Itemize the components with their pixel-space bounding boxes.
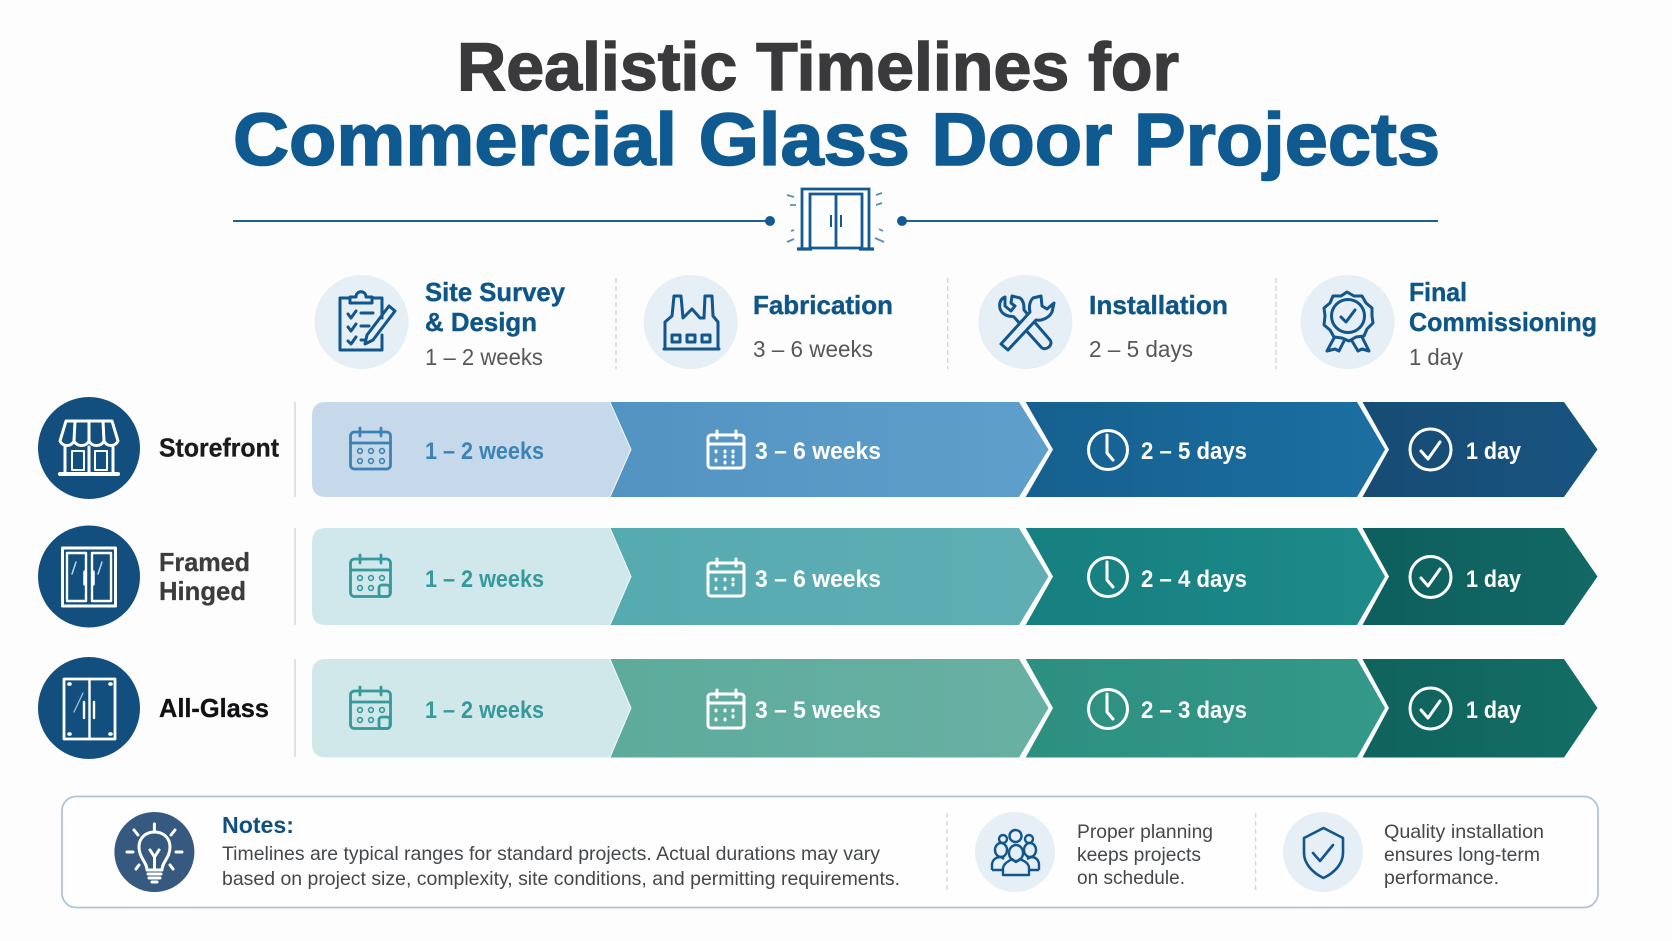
timeline: framed hinged: 2 – 4 days bbox=[1141, 566, 1247, 593]
tip: quality installation: Quality installation bbox=[1384, 821, 1544, 843]
label: framed hinged: Hinged bbox=[159, 576, 246, 606]
tip: quality installation: ensures long-term bbox=[1384, 844, 1540, 866]
row: framed hinged bbox=[38, 526, 1598, 628]
notes text: based on project size, complexity, site conditions, and permitting requirements. bbox=[222, 868, 900, 890]
icon: storefront bbox=[38, 397, 140, 499]
tip: proper planning: keeps projects bbox=[1077, 844, 1201, 866]
icon: calendar bbox=[708, 431, 744, 468]
timeline: storefront: 1 – 2 weeks bbox=[425, 438, 544, 465]
phase header: final commissioning: Commissioning bbox=[1409, 307, 1597, 337]
label: storefront: Storefront bbox=[159, 432, 279, 462]
timeline: storefront bbox=[312, 402, 1598, 497]
timeline: all-glass: 1 – 2 weeks bbox=[425, 697, 544, 724]
icon: calendar bbox=[708, 559, 744, 596]
phase header: site survey and design: Site Survey bbox=[425, 277, 566, 307]
label: framed hinged: Framed bbox=[159, 547, 250, 577]
title bbox=[233, 29, 1440, 181]
timeline: storefront: 3 – 6 weeks bbox=[755, 438, 881, 465]
phase header: final commissioning: Final bbox=[1409, 277, 1467, 307]
tip: proper planning: Proper planning bbox=[1077, 821, 1213, 843]
phase header: final commissioning bbox=[1276, 275, 1597, 370]
icon: shield bbox=[1283, 812, 1363, 892]
timeline: framed hinged: 1 day bbox=[1466, 566, 1522, 593]
timeline: framed hinged: 3 – 6 weeks bbox=[755, 566, 881, 593]
icon: rosette bbox=[1324, 292, 1373, 351]
tip: quality installation: performance. bbox=[1384, 867, 1499, 889]
timeline: framed hinged bbox=[312, 528, 1598, 625]
icon: all-glass door bbox=[38, 657, 140, 759]
phase header: site survey and design: 1 – 2 weeks bbox=[425, 344, 543, 370]
icon: calendar bbox=[350, 428, 390, 469]
phase header: installation: 2 – 5 days bbox=[1089, 336, 1193, 362]
timeline: framed hinged: 1 – 2 weeks bbox=[425, 566, 544, 593]
label: all-glass: All-Glass bbox=[159, 693, 269, 723]
phase header: fabrication bbox=[616, 275, 893, 369]
icon: check circle bbox=[1410, 688, 1451, 729]
phase header: fabrication: 3 – 6 weeks bbox=[753, 336, 873, 362]
icon: clock bbox=[1088, 558, 1128, 596]
timeline: storefront: 2 – 5 days bbox=[1141, 438, 1247, 465]
icon: factory bbox=[664, 296, 719, 349]
icon: wrench and screwdriver bbox=[1000, 296, 1054, 350]
icon: team bbox=[975, 812, 1055, 892]
timeline: storefront: 1 day bbox=[1466, 438, 1522, 465]
icon: check circle bbox=[1410, 556, 1451, 598]
icon: check circle bbox=[1410, 429, 1451, 470]
icon: calendar bbox=[350, 555, 390, 596]
icon: framed door bbox=[38, 526, 140, 628]
row: storefront bbox=[38, 397, 1598, 499]
phase header: installation bbox=[948, 275, 1228, 369]
icon: light bulb bbox=[114, 812, 194, 892]
notes text: Notes: bbox=[222, 812, 294, 838]
timeline: all-glass: 3 – 5 weeks bbox=[755, 697, 881, 724]
phase header: installation: Installation bbox=[1089, 290, 1228, 320]
title divider with door icon bbox=[233, 189, 1438, 249]
phase header: site survey and design: & Design bbox=[425, 307, 537, 337]
title: Realistic Timelines for bbox=[457, 29, 1179, 105]
tip: proper planning: on schedule. bbox=[1077, 867, 1185, 889]
title: Commercial Glass Door Projects bbox=[233, 98, 1440, 181]
icon: calendar bbox=[708, 690, 744, 728]
timeline: all-glass bbox=[312, 659, 1598, 758]
phase header: site survey and design bbox=[314, 275, 566, 370]
phase header: fabrication: Fabrication bbox=[753, 290, 893, 320]
icon: clock bbox=[1088, 690, 1128, 728]
phase header: final commissioning: 1 day bbox=[1409, 344, 1463, 370]
label: framed hinged bbox=[159, 547, 250, 606]
icon: glass door bbox=[787, 189, 884, 249]
timeline: all-glass: 2 – 3 days bbox=[1141, 697, 1247, 724]
icon: calendar bbox=[350, 687, 390, 728]
notes text bbox=[222, 812, 900, 890]
icon: clipboard bbox=[340, 292, 395, 350]
row: all-glass bbox=[38, 657, 1598, 759]
panel: notes bbox=[62, 796, 1598, 908]
notes text: Timelines are typical ranges for standard projects. Actual durations may vary bbox=[222, 843, 880, 865]
timeline: all-glass: 1 day bbox=[1466, 697, 1522, 724]
tip: quality installation bbox=[1384, 821, 1544, 889]
icon: clock bbox=[1088, 430, 1128, 470]
tip: proper planning bbox=[1077, 821, 1213, 889]
